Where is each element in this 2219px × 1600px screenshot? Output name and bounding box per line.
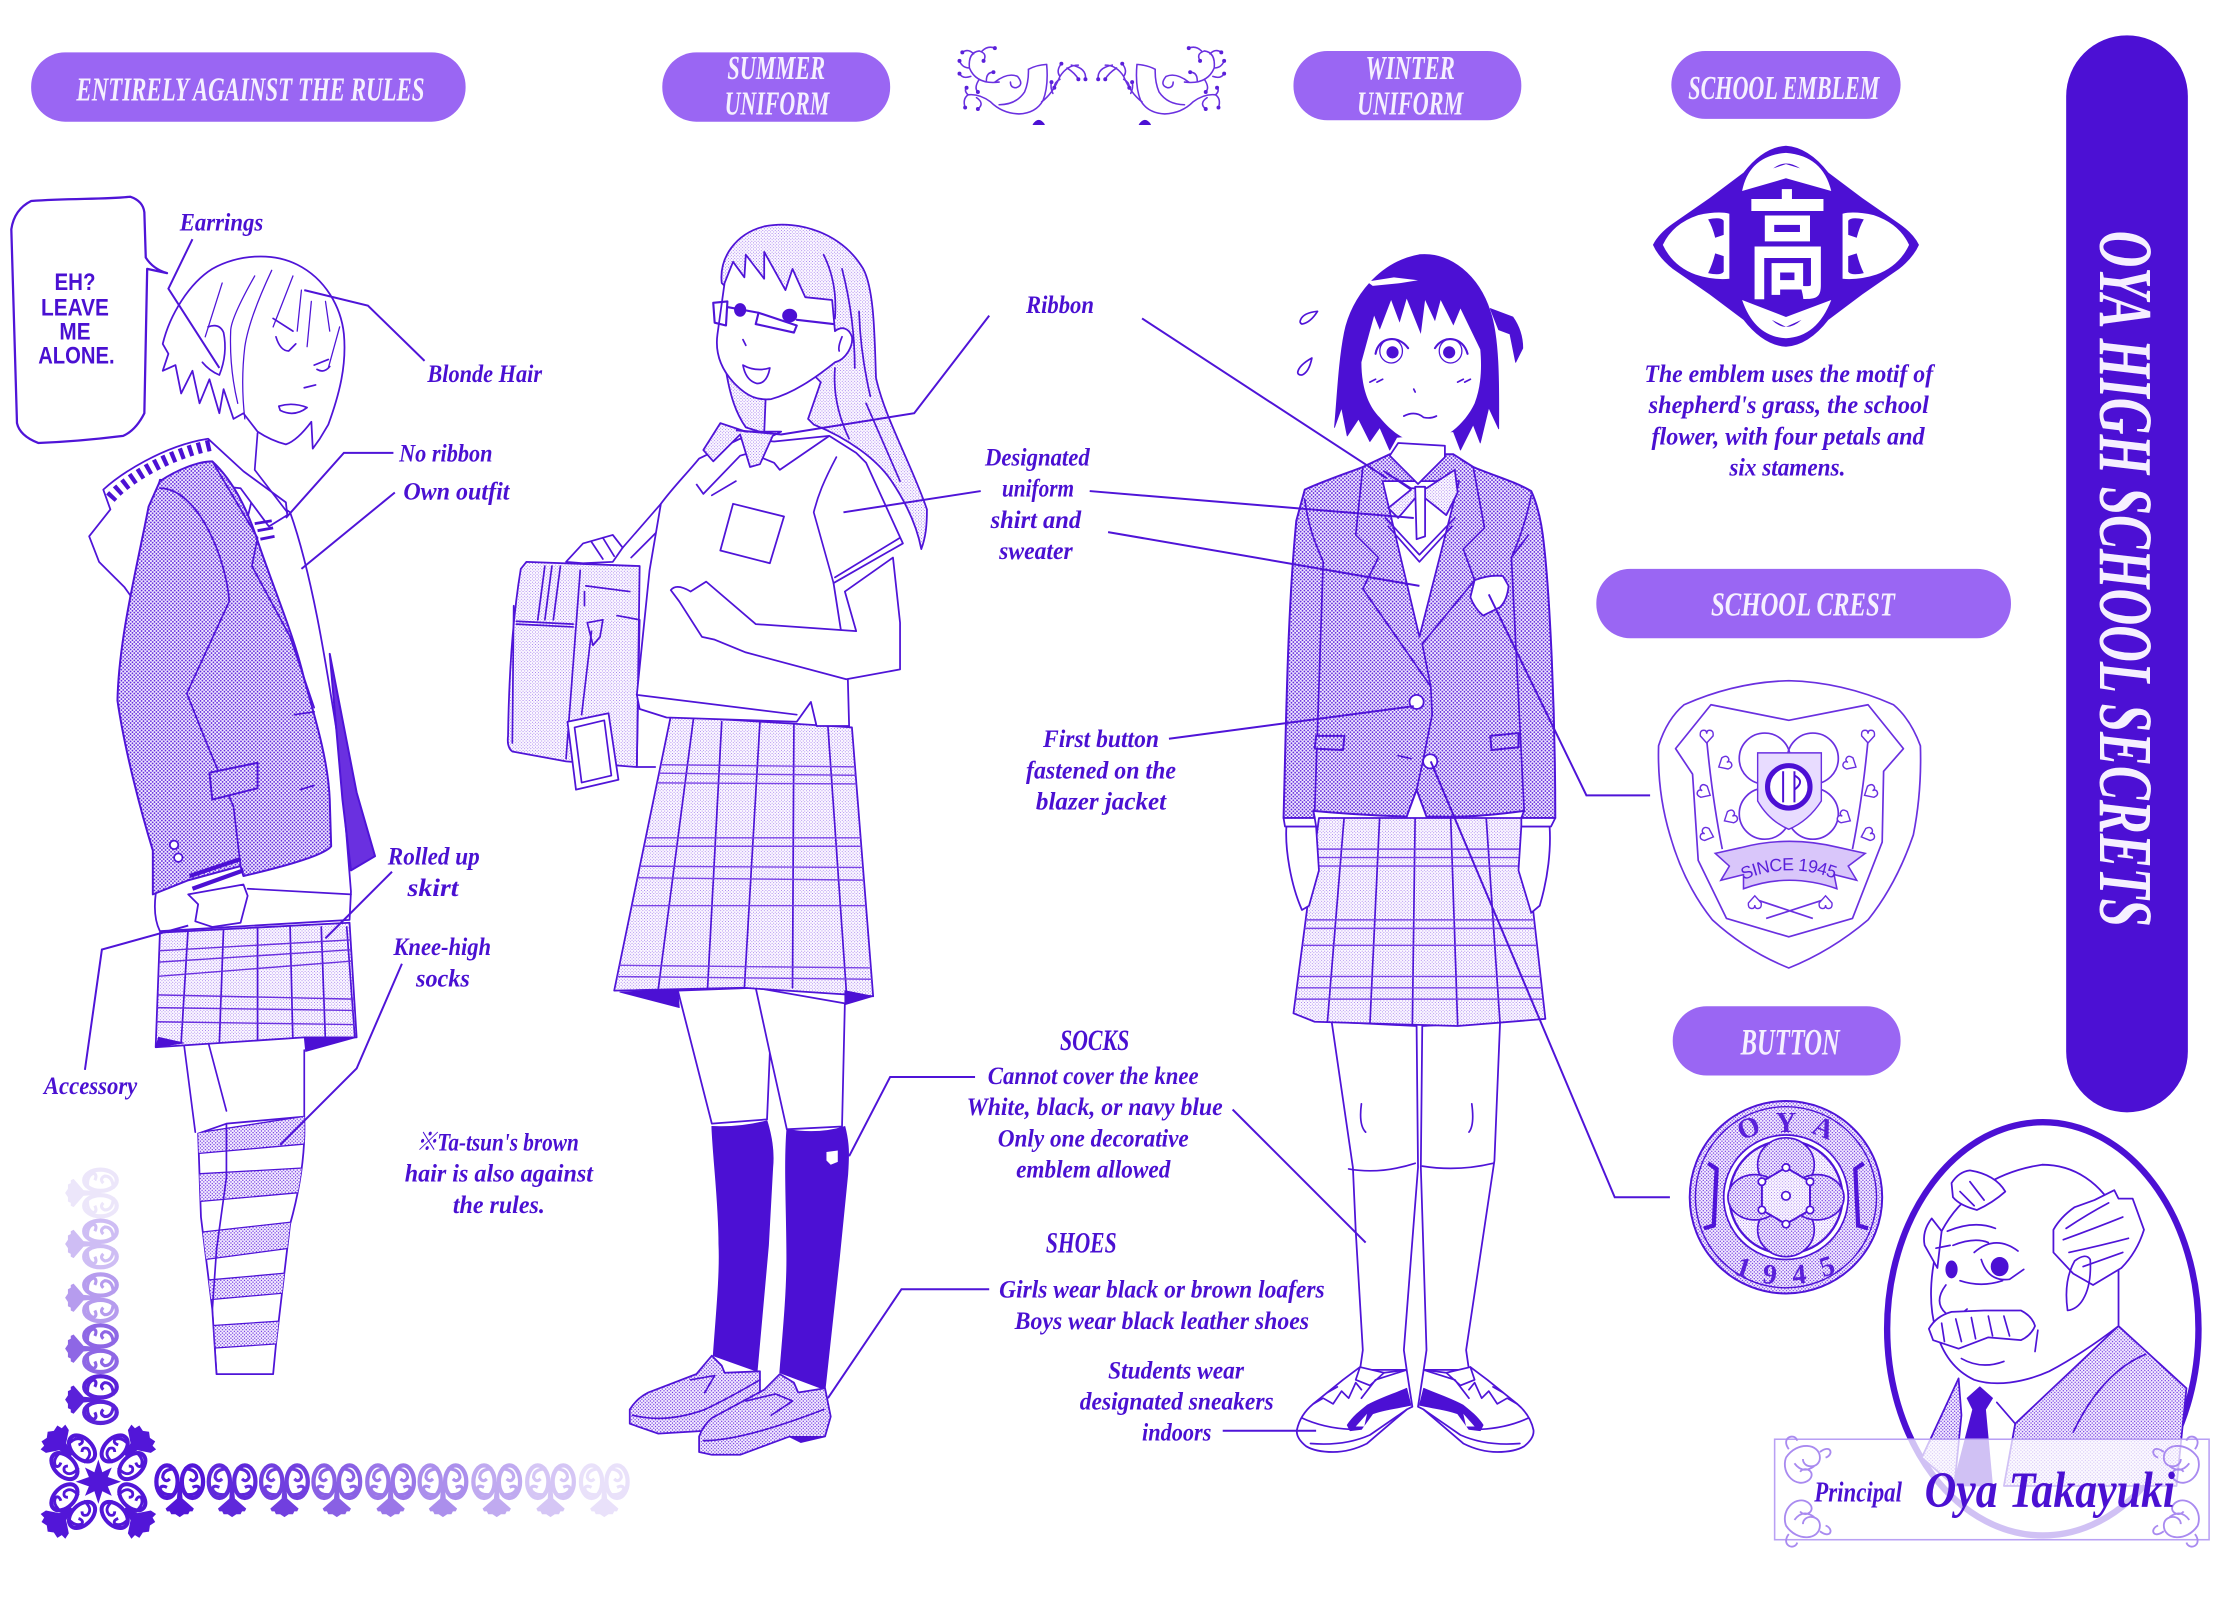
socks rules text: White, black, or navy blue — [967, 1092, 1223, 1121]
figure: summer uniform girl — [508, 225, 927, 1455]
dark scarf strip — [330, 654, 375, 870]
hair tufts — [1924, 1170, 2144, 1285]
heading pill: button: BUTTON — [1740, 1021, 1841, 1062]
shoes rules text: SHOES — [1046, 1227, 1117, 1259]
corner flourishes — [1785, 1437, 2199, 1547]
callout labels: rule-breaking: Blonde Hair — [427, 359, 543, 388]
callout labels: rule-breaking: Accessory — [42, 1071, 138, 1100]
horizontal fading strip — [156, 1465, 628, 1517]
heading pill: school emblem: SCHOOL EMBLEM — [1688, 70, 1881, 107]
head and dark hair — [1335, 255, 1523, 450]
title banner: OYA HIGH SCHOOL SECRETS — [2083, 231, 2168, 927]
face — [713, 252, 852, 399]
heading pill: winter uniform: UNIFORM — [1357, 86, 1464, 123]
socks rules text: SOCKS — [1060, 1025, 1129, 1057]
school crest — [1658, 680, 1922, 969]
callout labels: rule-breaking: socks — [415, 963, 470, 992]
speech bubble: ALONE. — [38, 343, 115, 370]
ribbon bow — [703, 423, 781, 467]
school crest: SINCE 1945 — [1741, 858, 1837, 879]
corner ornament — [32, 1170, 628, 1548]
school button: 5 — [1816, 1250, 1839, 1284]
sneakers — [1297, 1367, 1534, 1452]
leader lines — [85, 239, 1670, 1431]
school emblem: 高 — [1746, 155, 1828, 323]
suit — [1922, 1326, 2186, 1486]
school button: O — [1733, 1110, 1765, 1147]
arm and hand — [671, 558, 900, 679]
head — [1931, 1165, 2119, 1383]
callout labels: uniform: Ribbon — [1025, 290, 1094, 319]
blazer buttons — [1410, 695, 1424, 709]
heading pill: winter uniform — [1293, 50, 1521, 123]
school button: A — [1808, 1110, 1839, 1147]
hood with stripes — [89, 439, 287, 597]
pleated plaid skirt — [609, 716, 877, 1008]
moustache — [1929, 1310, 2035, 1349]
shoes rules text: Boys wear black leather shoes — [1014, 1306, 1309, 1335]
nameplate — [1775, 1437, 2209, 1547]
hands — [1286, 826, 1550, 913]
callout labels: uniform — [984, 290, 1176, 815]
school button: 1 — [1732, 1251, 1755, 1285]
figure: girl breaking the rules — [89, 257, 375, 1374]
emblem description: shepherd's grass, the school — [1648, 390, 1930, 419]
school button: 9 — [1761, 1259, 1779, 1291]
sweat drops — [1298, 311, 1318, 375]
callout labels: rule-breaking: Rolled up — [387, 842, 480, 871]
title banner — [2066, 35, 2188, 1112]
crest on pocket — [1470, 576, 1509, 616]
legs — [678, 988, 845, 1129]
heading pill: summer uniform: UNIFORM — [725, 86, 830, 123]
hand — [188, 884, 248, 927]
callout labels: uniform: uniform — [1002, 474, 1074, 503]
shoes rules text: Girls wear black or brown loafers — [999, 1275, 1325, 1304]
corner rosette — [32, 1416, 165, 1548]
navy socks — [712, 1121, 849, 1390]
school button: 4 — [1791, 1259, 1808, 1291]
legs — [1332, 1022, 1500, 1370]
heading pill: entirely against the rules: ENTIRELY AGAINST THE RULES — [76, 71, 425, 108]
shoes rules text: designated sneakers — [1080, 1387, 1274, 1416]
heading pill: school emblem — [1671, 51, 1901, 119]
heading pill: entirely against the rules — [31, 52, 466, 122]
oval frame — [1887, 1122, 2198, 1535]
heading pill: winter uniform: WINTER — [1366, 50, 1455, 87]
note on brown hair: the rules. — [453, 1190, 545, 1219]
shoes rules text: Students wear — [1108, 1355, 1245, 1384]
face details — [1936, 1225, 2024, 1314]
head and short hair — [163, 257, 345, 512]
heading pill: school crest: SCHOOL CREST — [1711, 587, 1896, 624]
emblem description: six stamens. — [1728, 452, 1845, 481]
loafers — [630, 1356, 831, 1455]
principal name: Principal — [1813, 1478, 1902, 1509]
blazer — [117, 461, 331, 894]
callout labels: rule-breaking: Knee-high — [393, 932, 491, 961]
short plaid skirt — [156, 923, 357, 1051]
speech bubble: ME — [59, 319, 91, 346]
speech bubble: EH? — [54, 269, 96, 296]
decorative top ornament — [958, 46, 1226, 125]
callout labels: rule-breaking: skirt — [406, 873, 460, 902]
speech bubble: LEAVE — [41, 295, 109, 322]
speech bubble — [11, 197, 167, 443]
callout labels: uniform: shirt and — [990, 505, 1082, 534]
shoes rules text: indoors — [1142, 1418, 1211, 1447]
callout labels: uniform: Designated — [984, 443, 1091, 472]
socks rules text: Only one decorative — [998, 1123, 1189, 1152]
emblem description: flower, with four petals and — [1652, 421, 1926, 450]
note on brown hair: ※Ta-tsun's brown — [416, 1128, 579, 1157]
V-neck sweater — [1383, 481, 1459, 637]
hoodie body — [155, 488, 351, 931]
emblem description — [1644, 359, 1935, 481]
plaid skirt — [1288, 814, 1550, 1026]
callout labels: uniform: sweater — [998, 536, 1074, 565]
heading pill: summer uniform: SUMMER — [727, 50, 825, 87]
bag — [508, 504, 661, 790]
shoes rules text — [999, 1227, 1325, 1447]
school button — [1690, 1101, 1882, 1293]
socks rules text: emblem allowed — [1016, 1154, 1171, 1183]
note on brown hair: hair is also against — [405, 1159, 594, 1188]
blazer — [1284, 454, 1555, 826]
heading pill: button — [1673, 1006, 1901, 1076]
callout labels: uniform: fastened on the — [1026, 755, 1176, 784]
shirt — [637, 436, 903, 726]
callout labels: uniform: First button — [1042, 724, 1159, 753]
nameplate: Oya Takayuki — [1925, 1463, 2175, 1519]
vertical fading strip — [65, 1170, 117, 1423]
socks rules text: Cannot cover the knee — [988, 1061, 1199, 1090]
school emblem — [1653, 146, 1919, 347]
callout labels: rule-breaking: No ribbon — [398, 438, 492, 467]
socks and legs — [184, 1042, 311, 1374]
long hair behind the shirt — [721, 225, 927, 549]
ear — [2066, 1256, 2090, 1310]
callout labels: rule-breaking: Own outfit — [403, 477, 510, 506]
heading pill: summer uniform — [662, 50, 890, 123]
socks rules text — [967, 1025, 1223, 1183]
callout labels: rule-breaking: Earrings — [179, 208, 263, 237]
school button: Y — [1776, 1108, 1796, 1139]
callout labels: rule-breaking — [42, 208, 543, 1100]
heading pill: school crest — [1596, 569, 2011, 638]
callout labels: uniform: blazer jacket — [1036, 786, 1167, 815]
shirt collar and bow — [1384, 443, 1458, 539]
principal portrait — [1887, 1122, 2198, 1535]
note on brown hair — [405, 1128, 594, 1219]
emblem description: The emblem uses the motif of — [1644, 359, 1935, 388]
figure: winter uniform girl — [1284, 255, 1555, 1452]
